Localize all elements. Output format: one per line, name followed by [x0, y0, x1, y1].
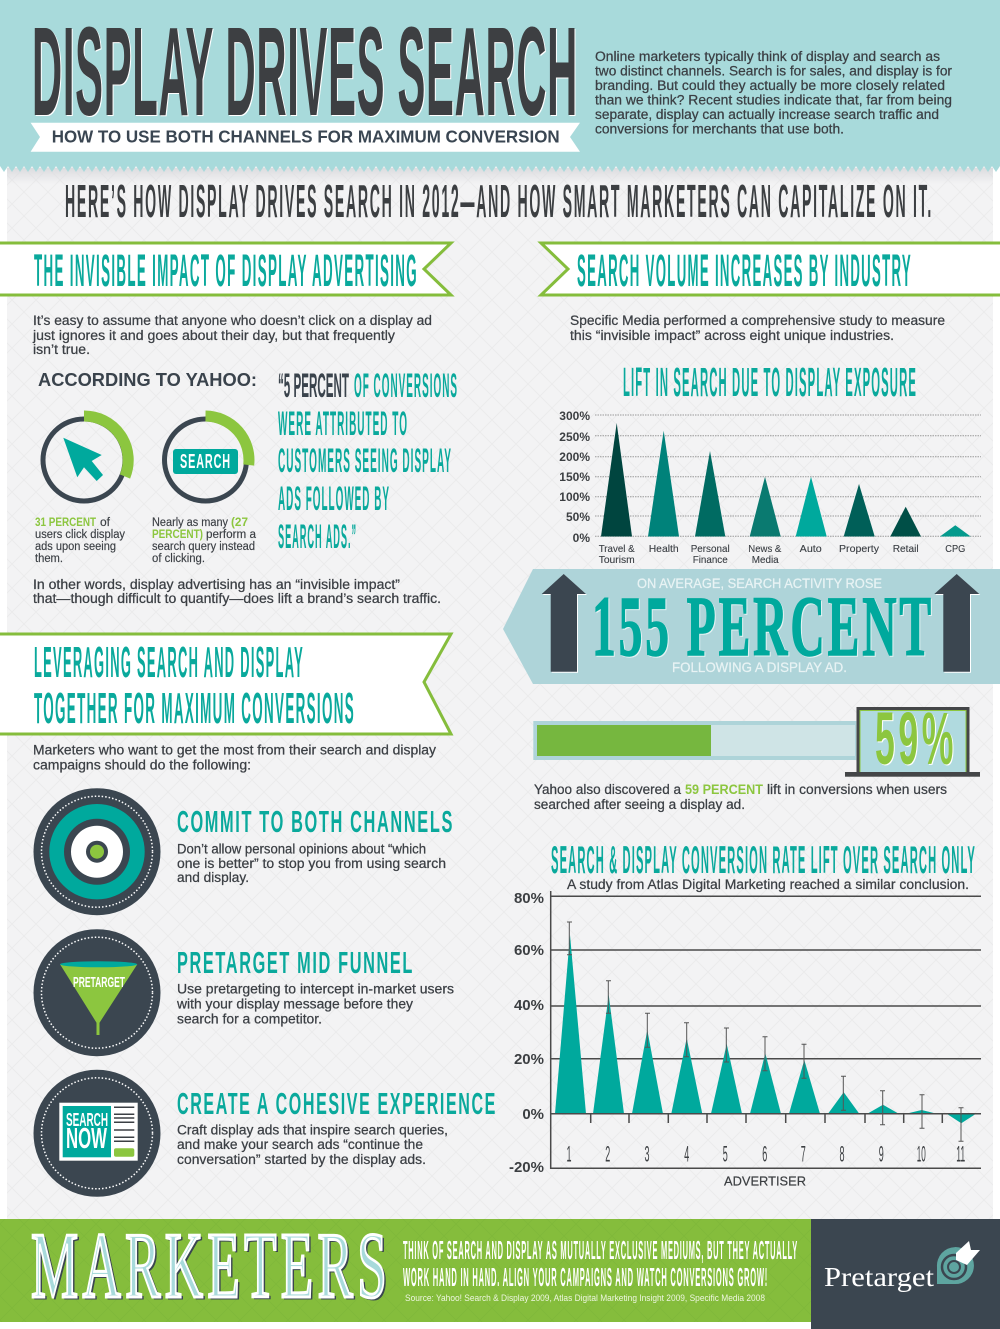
tip 2: pretarget mid funnel: with your display message before they: [176, 996, 413, 1012]
footer word: marketers: [31, 1214, 393, 1320]
bar chart: lift by industry: 300%: [559, 409, 590, 423]
bar chart: conversion lift by advertiser: 1: [566, 1142, 572, 1167]
header band: [0, 0, 1000, 172]
intro text: campaigns should do the following:: [33, 758, 251, 772]
bar chart: lift by industry: 50%: [566, 510, 590, 524]
tip 3: cohesive experience: conversation” started by the display ads.: [177, 1152, 426, 1167]
tip 1: commit to both channels: and display.: [177, 870, 249, 885]
intro paragraph: conversions for merchants that use both.: [595, 122, 844, 136]
bar chart: lift by industry: CPG: [945, 543, 965, 555]
intro text: [33, 742, 436, 772]
text: 59 percent lift: Yahoo also discovered a: [534, 782, 681, 797]
panel: footer: [0, 1214, 1000, 1329]
icon: laptop with 59 percent: [845, 697, 980, 781]
tip 1: commit to both channels: [177, 804, 454, 885]
intro paragraph: separate, display can actually increase search traffic and: [595, 107, 939, 122]
ribbon heading: leveraging: [0, 634, 452, 734]
intro paragraph: [595, 49, 953, 136]
closing text: [33, 577, 441, 606]
icon: search now ad: SEARCH: [66, 1110, 108, 1130]
icon: search now ad: [34, 1070, 160, 1197]
bar chart: conversion lift by advertiser: 20%: [514, 1051, 544, 1068]
intro text: Specific Media performed a comprehensive study to measure: [570, 313, 945, 328]
arrow: right up arrow: [934, 574, 980, 673]
intro paragraph: Online marketers typically think of display and search as: [595, 49, 940, 64]
tip 3: cohesive experience: Craft display ads that inspire search queries,: [177, 1122, 448, 1138]
intro text: Marketers who want to get the most from their search and display: [33, 742, 436, 758]
intro paragraph: branding. But could they actually be more closely related: [595, 78, 945, 93]
bar chart: lift by industry: Personal: [691, 543, 730, 555]
closing text: that—though difficult to quantify—does lift a brand’s search traffic.: [33, 591, 441, 606]
bar chart: conversion lift by advertiser: 3: [644, 1142, 650, 1167]
banner top line: ON AVERAGE, SEARCH ACTIVITY ROSE: [637, 575, 882, 591]
tip 2: pretarget mid funnel: Use pretargeting to intercept in-market users: [177, 982, 454, 996]
caption: 27 percent: of clicking.: [152, 553, 205, 565]
icon: funnel: PRETARGET: [73, 974, 125, 991]
subtitle ribbon: [31, 123, 580, 152]
bar chart: lift by industry: 0%: [573, 531, 590, 545]
tip 2: pretarget mid funnel: search for a competitor.: [177, 1012, 322, 1026]
pull quote: SEARCH ADS.”: [278, 518, 357, 556]
bar chart: conversion lift by advertiser: 10: [917, 1142, 926, 1167]
arrow: left up arrow: [542, 574, 587, 673]
intro text: [570, 313, 945, 343]
pull quote: “5 PERCENT: [278, 367, 349, 405]
bar chart: conversion lift by advertiser: 4: [684, 1142, 689, 1167]
tip 3: cohesive experience: CREATE A COHESIVE EXPERIENCE: [177, 1086, 497, 1121]
icon: cursor ring 31 percent: [43, 416, 128, 501]
text: ADS FOLLOWED BY: [278, 480, 390, 518]
caption: 27 percent: PERCENT): [152, 529, 203, 541]
intro text: [32, 313, 432, 357]
icon: search ring 27 percent: SEARCH: [180, 451, 231, 473]
caption: 27 percent: search query instead: [152, 541, 255, 553]
caption: 27 percent: Nearly as many: [152, 517, 228, 529]
title: [32, 1, 579, 143]
bar chart: lift by industry: 200%: [559, 450, 590, 464]
progress bar: 59 percent: [533, 697, 980, 781]
tip 2: pretarget mid funnel: [176, 945, 454, 1026]
tip 1: commit to both channels: COMMIT TO BOTH CHANNELS: [177, 804, 454, 839]
closing text: In other words, display advertising has an “invisible impact”: [33, 577, 400, 592]
according to yahoo heading: ACCORDING TO YAHOO:: [38, 369, 257, 390]
bar chart: lift by industry: Media: [752, 554, 779, 566]
bar chart: conversion lift by advertiser: 0%: [522, 1106, 544, 1123]
bar chart: conversion lift by advertiser: 60%: [514, 942, 544, 959]
intro text: It’s easy to assume that anyone who doesn’t click on a display ad: [33, 313, 432, 328]
caption: 27 percent: (27: [231, 517, 248, 529]
icon: search ring 27 percent: [164, 416, 249, 501]
source note: Source: Yahoo! Search & Display 2009, Atlas Digital Marketing Insight 2009, Specific Media 2008: [405, 1293, 765, 1304]
bar chart: lift by industry: Tourism: [599, 554, 635, 566]
intro text: just ignores it and goes about their day, but that frequently: [32, 328, 395, 343]
tip 3: cohesive experience: and make your search ads “continue the: [177, 1137, 423, 1152]
bar chart: conversion lift by advertiser: 7: [801, 1142, 806, 1167]
tip 1: commit to both channels: one is better” to stop you from using search: [177, 856, 446, 871]
caption: 31 percent: [35, 517, 125, 565]
text: WERE ATTRIBUTED TO: [278, 405, 408, 443]
bar chart: lift by industry: Finance: [693, 554, 728, 566]
tip 3: cohesive experience: [177, 1086, 497, 1167]
bar chart: conversion lift by advertiser: 9: [879, 1142, 884, 1167]
bar chart: conversion lift by advertiser: 6: [762, 1142, 767, 1167]
caption: 31 percent: them.: [35, 553, 63, 565]
bar chart: conversion lift by advertiser: 11: [956, 1142, 965, 1167]
text: 59 percent lift: [534, 782, 947, 812]
caption: 31 percent: ads upon seeing: [35, 541, 116, 553]
bar chart: conversion lift by advertiser: 5: [723, 1142, 728, 1167]
caption: 27 percent: perform a: [206, 529, 257, 541]
bar chart: conversion lift by advertiser: 40%: [514, 997, 544, 1014]
bar chart: lift by industry: News &: [748, 543, 781, 555]
bar chart: conversion lift by advertiser: 80%: [514, 890, 544, 907]
bar chart: conversion lift by advertiser: [509, 890, 981, 1189]
logo: pretarget: [824, 1241, 980, 1292]
bar chart: lift by industry: Retail: [893, 543, 919, 555]
intro text: this “invisible impact” across eight unique industries.: [570, 328, 894, 343]
footer word: marketers: MARKETERS: [33, 1216, 393, 1320]
bar chart: lift by industry: Property: [839, 543, 880, 555]
caption: 27 percent: [152, 517, 257, 565]
intro paragraph: than we think? Recent studies indicate that, far from being: [595, 92, 952, 108]
panel: invisible impact: [0, 242, 458, 606]
panel: search volume: [540, 242, 1000, 566]
caption: 31 percent: 31 PERCENT: [35, 517, 96, 529]
ribbon heading: invisible impact: [0, 242, 452, 296]
intro text: isn’t true.: [33, 342, 90, 357]
text: 59 percent lift: searched after seeing a display ad.: [534, 797, 745, 812]
icon: search now ad: NOW: [66, 1123, 107, 1155]
panel: leveraging search and display: LEVERAGING SEARCH AND DISPLAY: [34, 638, 304, 687]
tip 2: pretarget mid funnel: PRETARGET MID FUNNEL: [177, 945, 414, 980]
panel: leveraging search and display: [0, 634, 497, 1197]
caption: 31 percent: users click display: [35, 529, 125, 541]
bar chart: conversion lift by advertiser: -20%: [509, 1159, 544, 1176]
pull quote: [278, 367, 458, 556]
chart subtitle: A study from Atlas Digital Marketing reached a similar conclusion.: [567, 877, 969, 892]
panel: 155 percent banner: [503, 569, 1000, 684]
bar chart: lift by industry: 100%: [559, 490, 590, 504]
subtitle ribbon: HOW TO USE BOTH CHANNELS FOR MAXIMUM CONVERSION: [52, 127, 560, 147]
tip 1: commit to both channels: Don’t allow personal opinions about “which: [177, 842, 426, 856]
bar chart: conversion lift by advertiser: 2: [605, 1142, 610, 1167]
bar chart: lift by industry: Health: [649, 543, 679, 555]
bar chart: lift by industry: 150%: [559, 470, 590, 484]
footer word: marketers: MARKETERS: [31, 1214, 391, 1318]
intro paragraph: two distinct channels. Search is for sales, and display is for: [595, 64, 953, 78]
text: CUSTOMERS SEEING DISPLAY: [278, 442, 452, 480]
caption: 31 percent: of: [100, 517, 111, 529]
banner bottom line: FOLLOWING A DISPLAY AD.: [672, 659, 847, 675]
icon: target: [34, 788, 160, 915]
bar chart: lift by industry: [559, 409, 981, 566]
bar chart: conversion lift by advertiser: 8: [840, 1142, 844, 1167]
bar chart: lift by industry: Auto: [800, 543, 822, 555]
bar chart: lift by industry: 250%: [559, 430, 590, 444]
text: 59 percent lift: 59 PERCENT: [685, 782, 764, 797]
bar chart: conversion lift by advertiser: ADVERTISER: [724, 1174, 806, 1189]
footer message: [403, 1235, 798, 1292]
text: 59 percent lift: lift in conversions when users: [767, 782, 947, 797]
icon: funnel: [34, 929, 160, 1056]
logo: pretarget: Pretarget: [824, 1262, 935, 1292]
text: OF CONVERSIONS: [354, 367, 458, 405]
bar chart: lift by industry: Travel &: [599, 543, 635, 555]
